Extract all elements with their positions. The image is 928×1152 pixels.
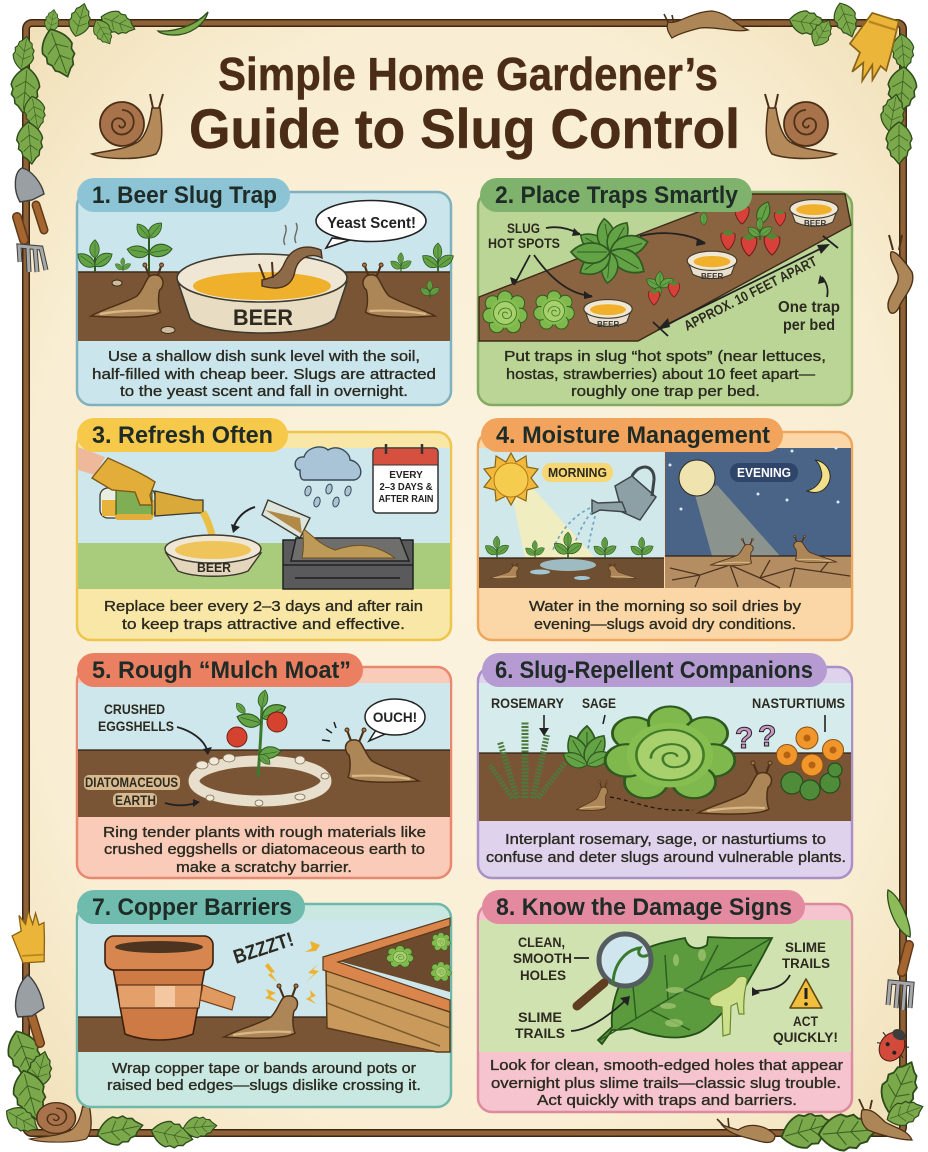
illustration: evening side: EVENING bbox=[737, 466, 791, 480]
caption bbox=[486, 831, 846, 866]
icon: calendar: AFTER RAIN bbox=[378, 494, 434, 505]
caption: to keep traps attractive and effective. bbox=[122, 616, 405, 633]
caption: Replace beer every 2–3 days and after rain bbox=[104, 598, 423, 615]
label: BZZZT: BZZZT! bbox=[231, 929, 297, 969]
caption: half-filled with cheap beer. Slugs are attracted bbox=[92, 366, 436, 383]
caption: Wrap copper tape or bands around pots or bbox=[112, 1060, 416, 1077]
heading tab: 4. Moisture Management bbox=[496, 422, 770, 449]
panel 1: Beer Slug Trap bbox=[75, 178, 456, 405]
speech bubble: ouch: OUCH! bbox=[373, 710, 417, 725]
labels: TRAILS bbox=[782, 956, 830, 971]
heading tab: 8. Know the Damage Signs bbox=[496, 894, 792, 921]
caption bbox=[103, 824, 426, 876]
border decorations top right bbox=[787, 0, 918, 164]
illustration: companion plants: ? bbox=[758, 720, 776, 753]
icon: yellow glove top right bbox=[839, 7, 905, 88]
heading tab: 1. Beer Slug Trap bbox=[92, 182, 277, 209]
icon: bottom left glove bbox=[9, 909, 49, 966]
caption: to the yeast scent and fall in overnight. bbox=[120, 383, 408, 400]
title: Simple Home Gardener’s bbox=[218, 48, 718, 100]
border decorations bottom left bbox=[1, 1026, 218, 1152]
icon: bottom left trowel bbox=[16, 975, 44, 1043]
caption: Look for clean, smooth-edged holes that appear bbox=[490, 1057, 843, 1074]
icon: corner slug bbox=[859, 1099, 912, 1140]
icon: left snail bbox=[92, 94, 163, 158]
caption: evening—slugs avoid dry conditions. bbox=[534, 616, 796, 633]
illustration: refreshing beer bbox=[78, 447, 450, 589]
caption: roughly one trap per bed. bbox=[571, 383, 760, 400]
labels bbox=[84, 702, 180, 808]
labels: EARTH bbox=[115, 793, 156, 808]
panel 5: Rough Mulch Moat bbox=[77, 653, 451, 878]
caption bbox=[104, 598, 423, 633]
caption bbox=[107, 1060, 421, 1094]
illustration: mulch ring bbox=[78, 683, 450, 817]
caption: hostas, strawberries) about 10 feet apart— bbox=[506, 366, 815, 383]
heading tab: 5. Rough “Mulch Moat” bbox=[92, 657, 351, 684]
heading tab: 6. Slug-Repellent Companions bbox=[495, 657, 813, 684]
labels: SLIME bbox=[785, 940, 826, 955]
title bbox=[189, 48, 740, 160]
illustration: copper barriers bbox=[78, 918, 451, 1052]
labels: ACT bbox=[793, 1014, 819, 1029]
caption bbox=[490, 1057, 843, 1109]
icon: warning triangle bbox=[790, 979, 822, 1008]
border decorations bottom right bbox=[777, 1055, 927, 1152]
icon: caterpillar bbox=[888, 890, 910, 937]
border decorations top left bbox=[9, 1, 139, 165]
illustration: beer trap in soil bbox=[75, 219, 456, 341]
labels: HOLES bbox=[520, 968, 566, 983]
illustration: garden bed with traps: BEER bbox=[804, 219, 826, 228]
icon: garden fork right bbox=[888, 945, 912, 1010]
illustration: refreshing beer: BEER bbox=[197, 561, 231, 575]
caption bbox=[92, 348, 436, 400]
labels bbox=[488, 221, 840, 334]
caption: Put traps in slug “hot spots” (near lettuces, bbox=[504, 348, 826, 365]
illustration: beer trap in soil: BEER bbox=[233, 305, 293, 330]
illustration: damaged leaf bbox=[479, 920, 851, 1052]
heading tab: 3. Refresh Often bbox=[92, 422, 273, 449]
panel 4: Moisture Management bbox=[478, 418, 852, 640]
icon: right frame slug bbox=[888, 235, 913, 313]
heading tab: 2. Place Traps Smartly bbox=[495, 182, 739, 209]
panel 6: Slug-Repellent Companions bbox=[478, 653, 852, 878]
illustration: morning side bbox=[479, 448, 664, 588]
panel 7: Copper Barriers bbox=[77, 890, 451, 1107]
illustration: morning side: MORNING bbox=[548, 466, 607, 480]
labels: HOT SPOTS bbox=[488, 236, 560, 251]
labels: NASTURTIUMS bbox=[752, 696, 845, 711]
labels: SLIME bbox=[518, 1010, 562, 1025]
speech bubble: yeast scent bbox=[316, 200, 426, 248]
caption: Interplant rosemary, sage, or nasturtiums to bbox=[505, 831, 826, 848]
caption bbox=[529, 598, 802, 633]
caption bbox=[504, 348, 826, 400]
labels bbox=[513, 935, 838, 1045]
caption: Act quickly with traps and barriers. bbox=[537, 1092, 797, 1109]
panel 2: Place Traps Smartly bbox=[478, 178, 852, 405]
icon: right snail bbox=[765, 94, 836, 158]
icon: top slug bbox=[664, 11, 748, 38]
illustration: companion plants: ? bbox=[735, 722, 753, 755]
icon: calendar: 2–3 DAYS & bbox=[380, 482, 432, 493]
labels: CRUSHED bbox=[104, 702, 165, 717]
icon: ladybug bbox=[872, 1023, 914, 1067]
labels: ROSEMARY bbox=[491, 696, 564, 711]
labels: One trap bbox=[778, 299, 840, 316]
speech bubble: yeast scent: Yeast Scent! bbox=[327, 215, 416, 232]
illustration: garden bed with traps: BEER bbox=[701, 272, 723, 281]
caption: raised bed edges—slugs dislike crossing it. bbox=[107, 1077, 421, 1094]
caption: Water in the morning so soil dries by bbox=[529, 598, 802, 615]
panel 3: Refresh Often bbox=[77, 418, 451, 640]
labels: per bed bbox=[783, 317, 835, 334]
caption: Ring tender plants with rough materials like bbox=[103, 824, 426, 841]
labels: SLUG bbox=[507, 221, 540, 236]
labels: SAGE bbox=[582, 696, 616, 711]
illustration: garden bed with traps: BEER bbox=[597, 320, 619, 329]
labels bbox=[491, 696, 845, 711]
illustration: garden bed with traps bbox=[479, 194, 851, 341]
caption: crushed eggshells or diatomaceous earth to bbox=[104, 841, 425, 858]
caption: confuse and deter slugs around vulnerable plants. bbox=[486, 849, 846, 866]
speech bubble: ouch bbox=[365, 699, 425, 741]
title: Guide to Slug Control bbox=[189, 97, 740, 160]
icon: bottom left snail bbox=[30, 1097, 92, 1142]
panel 8: Know the Damage Signs bbox=[478, 890, 852, 1112]
icon: top pod bbox=[158, 12, 208, 35]
icon: bottom slug bbox=[717, 1118, 775, 1142]
illustration: companion plants bbox=[479, 683, 851, 821]
labels: QUICKLY! bbox=[773, 1030, 838, 1045]
caption: overnight plus slime trails—classic slug trouble. bbox=[491, 1075, 841, 1092]
caption: Use a shallow dish sunk level with the soil, bbox=[108, 348, 420, 365]
icon: calendar: EVERY bbox=[389, 470, 423, 481]
illustration: garden bed with traps: APPROX. 10 FEET APART bbox=[681, 253, 820, 334]
labels: CLEAN, bbox=[518, 935, 565, 950]
illustration: evening side bbox=[665, 446, 851, 588]
labels: EGGSHELLS bbox=[98, 719, 174, 734]
icon: calendar bbox=[373, 444, 438, 513]
heading tab: 7. Copper Barriers bbox=[92, 894, 292, 921]
labels: SMOOTH bbox=[513, 951, 572, 966]
heading tab bbox=[77, 418, 288, 452]
labels: DIATOMACEOUS bbox=[85, 775, 178, 790]
caption: make a scratchy barrier. bbox=[176, 859, 352, 876]
labels: TRAILS bbox=[515, 1026, 565, 1041]
icon: left tools bbox=[15, 168, 46, 272]
